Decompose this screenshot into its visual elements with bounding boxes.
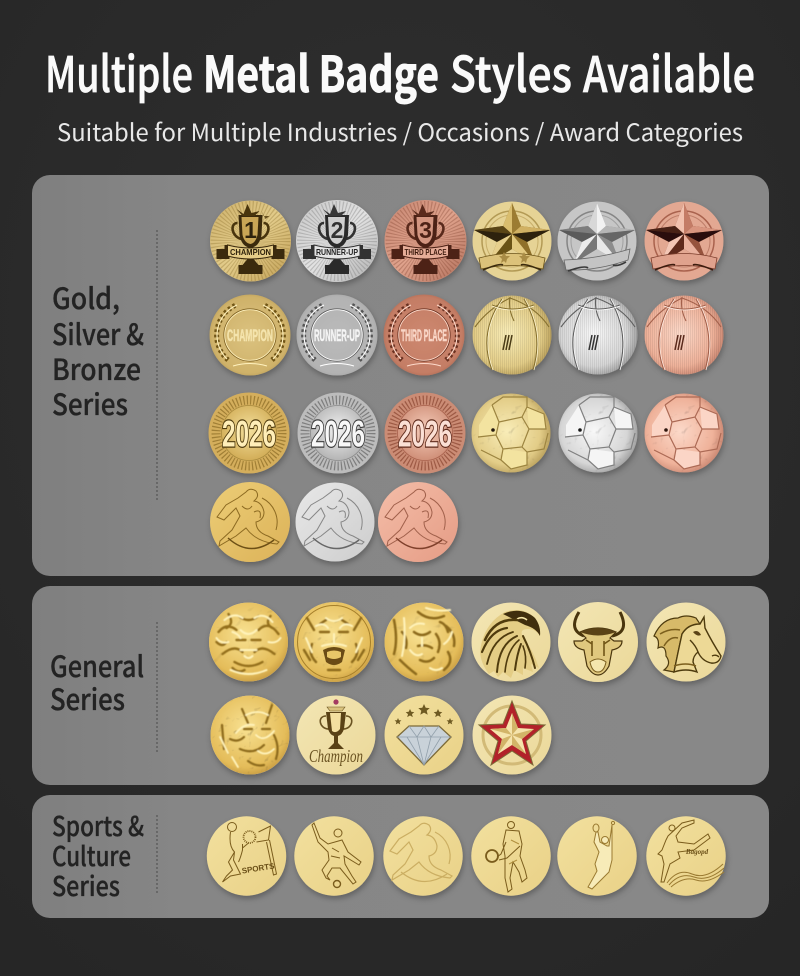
- badge: gold star: [472, 202, 552, 280]
- badge: bronze 2026: [384, 392, 466, 474]
- subtitle: Suitable for Multiple Industries / Occasions / Award Categories: [57, 113, 743, 148]
- badge: gold runner emblem: [210, 482, 290, 562]
- badge: silver 2026: 2026: [311, 414, 365, 454]
- panel: sports and culture series: [32, 795, 769, 918]
- title: Available: [583, 36, 755, 107]
- badge: gold basketball: [472, 296, 552, 374]
- heading: sports and culture series: Culture: [52, 835, 131, 874]
- badge: runner relief: [383, 816, 463, 896]
- badge: basketball sports: SPORTS: [241, 861, 276, 876]
- badge group: 2026 and football row: [208, 392, 724, 474]
- badge: bronze trophy third place: 3: [419, 217, 432, 243]
- badge group: trophy row: [210, 200, 724, 282]
- heading: gold, silver and bronze series: Bronze: [52, 347, 141, 389]
- badge: bronze runner emblem: [378, 482, 458, 562]
- heading: general series: [50, 644, 144, 719]
- badge group: sports and culture: [207, 816, 726, 896]
- badge: gold trophy champion: CHAMPION: [230, 247, 271, 257]
- badge: gold trophy champion: [210, 200, 291, 282]
- badge: silver 2026: [298, 392, 378, 474]
- badge: silver basketball: [558, 296, 638, 374]
- badge: gold laurel champion: [210, 294, 290, 376]
- badge: bronze laurel third place: THIRD PLACE: [401, 326, 447, 345]
- badge: silver trophy runner-up: [296, 200, 378, 282]
- badge: bronze football: [644, 394, 724, 472]
- badge: bronze basketball: [644, 296, 724, 374]
- badge: silver runner emblem: [296, 482, 374, 562]
- badge: bronze star: [644, 202, 724, 280]
- heading: sports and culture series: [52, 805, 144, 904]
- badge: gold 2026: [208, 392, 290, 474]
- badge: gold trophy champion: 1: [244, 217, 257, 243]
- badge: football player: [294, 816, 374, 896]
- badge: gold laurel champion: CHAMPION: [227, 326, 273, 345]
- badge: horse: [646, 602, 726, 682]
- heading: general series: Series: [50, 677, 125, 719]
- badge: silver trophy runner-up: RUNNER-UP: [316, 247, 358, 257]
- title: [45, 36, 755, 107]
- badge group: runner emblem row: [210, 482, 458, 562]
- heading: gold, silver and bronze series: Silver &: [52, 312, 144, 354]
- panel: general series: [32, 586, 769, 785]
- heading: gold, silver and bronze series: Series: [52, 382, 128, 424]
- badge: red star: [472, 696, 552, 774]
- badge group: laurel and basketball row: [210, 294, 724, 376]
- badge: volleyball player: [557, 816, 637, 896]
- heading: sports and culture series: Sports &: [52, 805, 144, 844]
- badge: wolf: [210, 696, 290, 774]
- badge: dragon: [209, 602, 288, 682]
- badge: bronze 2026: 2026: [398, 414, 452, 454]
- title: Multiple: [45, 36, 193, 107]
- badge: bronze laurel third place: [384, 294, 464, 376]
- badge: silver star: [558, 202, 636, 280]
- badge: lion: [384, 602, 464, 682]
- badge: eagle: [472, 602, 550, 682]
- badge: bronze trophy third place: [384, 200, 466, 282]
- badge: silver laurel runner-up: RUNNER-UP: [314, 326, 360, 345]
- badge: silver trophy runner-up: 2: [331, 217, 343, 243]
- badge group: general series row two: [210, 696, 552, 774]
- heading: gold, silver and bronze series: Gold,: [52, 276, 120, 318]
- badge group: general series row one: [209, 602, 726, 682]
- badge: diamond and stars: [384, 696, 464, 774]
- badge: gold 2026: 2026: [222, 414, 276, 454]
- badge: silver football: [558, 394, 638, 472]
- heading: general series: General: [50, 644, 144, 686]
- badge: dancer and music: Bagopd: [685, 848, 709, 856]
- badge: trophy champion: Champion: [309, 746, 363, 766]
- panel: gold, silver and bronze series: [32, 175, 769, 576]
- badge: gold football: [472, 394, 550, 472]
- badge: dancer and music: [646, 816, 726, 896]
- badge: basketball sports: [207, 816, 286, 896]
- heading: gold, silver and bronze series: [52, 276, 144, 424]
- badge: bronze trophy third place: THIRD PLACE: [404, 247, 447, 257]
- title: Metal Badge: [203, 36, 439, 107]
- heading: sports and culture series: Series: [52, 865, 120, 904]
- title: Styles: [450, 36, 572, 107]
- badge: trophy champion: [296, 696, 376, 774]
- badge: silver laurel runner-up: [296, 294, 378, 376]
- badge: tiger: [294, 602, 374, 682]
- badge: tennis player: [471, 816, 551, 896]
- badge: bull: [558, 602, 638, 682]
